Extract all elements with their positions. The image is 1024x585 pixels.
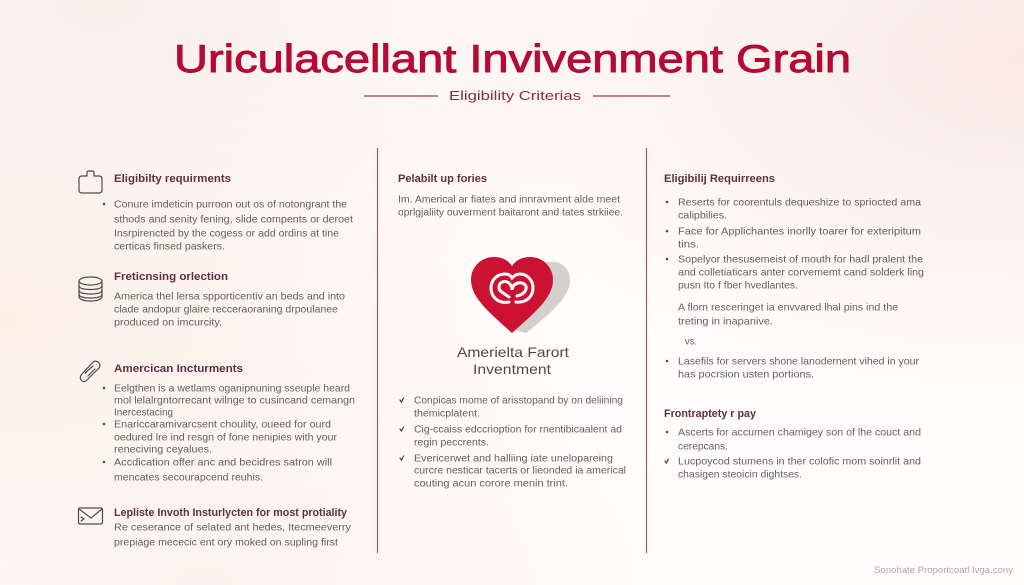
- checklist: couting acun corore menin trint.: [414, 478, 568, 490]
- icon: pencil: [80, 361, 100, 382]
- text block: note: [678, 302, 898, 348]
- icon: coin stack: [79, 277, 102, 301]
- text block: intro: Im. Americal ar fiates and innravment alde meet: [398, 194, 620, 206]
- text block: frontraptety bullets: Lucpoycod stumens in ther colofic mom soinrlit and: [678, 456, 921, 468]
- heading: american incturments: Amercican Incturments: [114, 363, 243, 375]
- text block: frontraptety bullets: chasigen steoicin dightses.: [678, 468, 802, 480]
- checklist: themicplatent.: [414, 408, 480, 420]
- text block: american incturments: Enariccaramivarcsent choulity, oueed for ourd: [114, 418, 331, 430]
- text block: american incturments: oedured lre ind resgn of fone nenipies with your: [114, 432, 337, 444]
- text block: requirement bullets: Sopelyor thesusemeist of mouth for hadl pralent the: [678, 254, 923, 266]
- title: Uriculacellant Invivenment Grain: [174, 38, 851, 81]
- text block: american incturments: mol lelalrgntorrecant wilnge to cusincand cemangn: [114, 394, 355, 406]
- icon: heart logo: [471, 257, 570, 333]
- text block: requirement bullets: [666, 196, 924, 292]
- text block: american incturments: reneciving ceyalues.: [114, 444, 212, 456]
- checklist: Conpicas mome of arisstopand by on deliining: [414, 394, 623, 406]
- checklist: Evericerwet and halliing iate unelopareing: [414, 452, 613, 464]
- text block: eligibility requirements: Conure imdeticin purroon out os of notongrant the: [114, 198, 347, 210]
- icon: hand outline: [79, 171, 102, 193]
- checklist: [400, 394, 626, 490]
- text block: eligibility requirements: sthods and senity fening, slide compents or deroet: [114, 214, 353, 226]
- text block: requirement bullets: Face for Applichantes inorlly toarer for exteripitum: [678, 226, 921, 238]
- heading: eligibility requirements: Eligibilty requirments: [114, 173, 231, 185]
- icon: envelope: [78, 508, 102, 524]
- heading: frontraptety pay: Frontraptety r pay: [664, 408, 757, 420]
- text block: lepliste invoth: prepiage mececic ent ory moked on supling first: [114, 536, 338, 548]
- logo caption: [457, 344, 569, 377]
- panel: left column: [78, 171, 355, 548]
- text block: requirement bullets: and colletiaticars anter corvememt cand solderk ling: [678, 266, 924, 278]
- text block: frontraptety bullets: [665, 426, 921, 480]
- text block: note: vs.: [685, 336, 697, 348]
- text block: lasefils bullet: [666, 356, 919, 380]
- text block: requirement bullets: Reserts for coorentuls dequeshize to spriocted ama: [678, 196, 921, 208]
- panel: centre column: [398, 173, 626, 490]
- checklist: regin peccrents.: [414, 436, 489, 448]
- text block: frontraptety bullets: cerepcans.: [678, 440, 728, 452]
- text block: american incturments: mencates secourapcend reuhis.: [114, 472, 263, 484]
- text block: american incturments: Eelgthen is a wetlams oganipnuning sseuple heard: [114, 382, 350, 394]
- text block: eligibility requirements: Insrpirencted by the cogess or add ordins at tine: [114, 228, 339, 240]
- logo caption: Amerielta Farort: [457, 344, 569, 360]
- text block: american incturments: [103, 382, 355, 484]
- text block: requirement bullets: calipbilies.: [678, 210, 727, 222]
- text block: frontraptety bullets: Ascerts for accumen chamigey son of lhe couct and: [678, 426, 921, 438]
- text block: requirement bullets: pusn Ito f fber hvedlantes.: [678, 280, 798, 292]
- text block: lasefils bullet: Lasefils for servers shone lanodernent vihed in your: [678, 356, 919, 368]
- text block: american incturments: Inercestacing: [114, 406, 173, 418]
- heading: lepliste invoth: Lepliste Invoth Insturlycten for most protiality: [114, 507, 348, 519]
- subtitle with rules: Eligibility Criterias: [449, 88, 582, 103]
- text block: note: treting in inapanive.: [678, 316, 773, 328]
- text block: note: A florn resceringet ia envvared lhal pins ind the: [678, 302, 898, 314]
- text block: requirement bullets: tins.: [678, 238, 699, 250]
- text block: eligibility requirements: certicas finsed paskers.: [114, 240, 225, 252]
- text block: intro: [398, 194, 623, 218]
- logo caption: Inventment: [473, 361, 551, 377]
- text block: american incturments: Accdication offer anc and becidres satron will: [114, 456, 332, 468]
- text block: fretionsing orlection: clade andopur glaire recceraoraning drpoulanee: [114, 304, 338, 316]
- text block: lepliste invoth: [114, 522, 352, 548]
- text block: intro: oprlgjaliity ouverment baitaront and tates strkiiee.: [398, 206, 623, 218]
- checklist: curcre nesticar tacerts or lieonded ia americal: [414, 464, 626, 476]
- text block: fretionsing orlection: produced on imcurcity.: [114, 316, 222, 328]
- heading: pelabilt up fories: Pelabilt up fories: [398, 173, 487, 185]
- checklist: Cig-ccaiss edccrioption for rnentibicaalent ad: [414, 424, 622, 436]
- text block: fretionsing orlection: America thel lersa spporticentiv an beds and into: [114, 290, 345, 302]
- heading: eligibility requirements: Eligibilij Requirreens: [664, 173, 775, 185]
- heading: fretionsing orlection: Freticnsing orlection: [114, 271, 228, 283]
- text block: fretionsing orlection: [114, 290, 345, 328]
- text block: lasefils bullet: has pocrsion usten portions.: [678, 368, 814, 380]
- panel: right column: [664, 173, 924, 480]
- footer credit: Sonohate Proportcoatl Ivga.cony: [874, 565, 1013, 576]
- text block: lepliste invoth: Re ceserance of selated ant hedes, Itecmeeverry: [114, 522, 352, 534]
- text block: eligibility requirements: [103, 198, 353, 252]
